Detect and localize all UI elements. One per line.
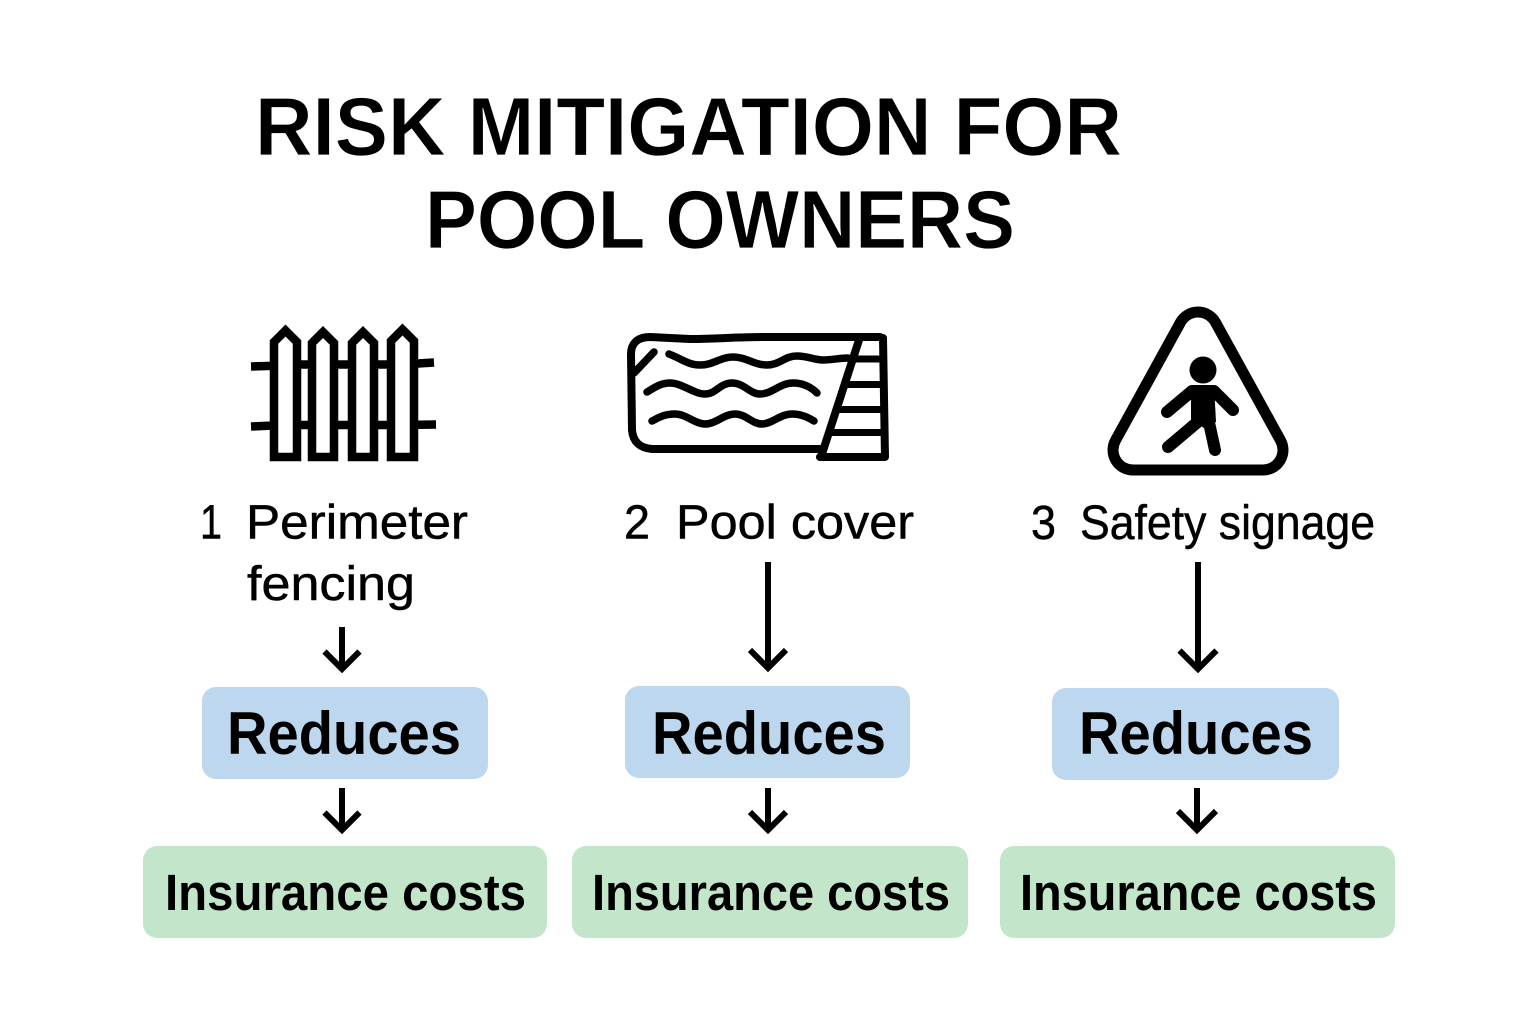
step label: 1 Perimeter fencing: Perimeter — [246, 496, 468, 550]
box: reduces — [1052, 688, 1339, 780]
box: reduces — [202, 687, 488, 779]
box: reduces: Reduces — [227, 700, 461, 767]
icon: fence — [251, 330, 436, 457]
box: insurance costs: Insurance costs — [592, 864, 950, 921]
icon: pool with cover — [631, 337, 885, 460]
arrow: to insurance costs — [750, 788, 786, 830]
box: insurance costs: Insurance costs — [165, 864, 526, 921]
column 2: pool cover — [572, 337, 968, 938]
step label: 2 Pool cover: 2 — [624, 496, 650, 550]
arrow: to reduces — [1180, 562, 1216, 669]
title — [255, 80, 1122, 266]
arrow: to insurance costs — [1178, 788, 1216, 830]
box: reduces: Reduces — [1079, 700, 1313, 767]
title: RISK MITIGATION FOR — [255, 80, 1122, 173]
arrow: to reduces — [750, 562, 786, 668]
step label: 1 Perimeter fencing: 1 — [200, 496, 222, 550]
box: insurance costs — [1000, 846, 1395, 938]
title: POOL OWNERS — [425, 173, 1015, 266]
column 1: perimeter fencing — [143, 330, 547, 938]
box: insurance costs: Insurance costs — [1020, 864, 1377, 921]
step label: 2 Pool cover: Pool cover — [676, 496, 914, 550]
step label: 1 Perimeter fencing: fencing — [247, 558, 415, 611]
box: insurance costs — [143, 846, 547, 938]
step label: 1 Perimeter fencing — [200, 496, 468, 611]
box: reduces — [625, 686, 910, 778]
step label: 3 Safety signage: Safety signage — [1080, 497, 1375, 550]
icon: warning sign with person — [1113, 312, 1283, 470]
column 3: safety signage — [1000, 312, 1395, 938]
box: reduces: Reduces — [652, 700, 886, 767]
box: insurance costs — [572, 846, 968, 938]
arrow: to reduces — [324, 627, 360, 669]
arrow: to insurance costs — [324, 788, 360, 830]
step label: 3 Safety signage: 3 — [1031, 497, 1056, 550]
